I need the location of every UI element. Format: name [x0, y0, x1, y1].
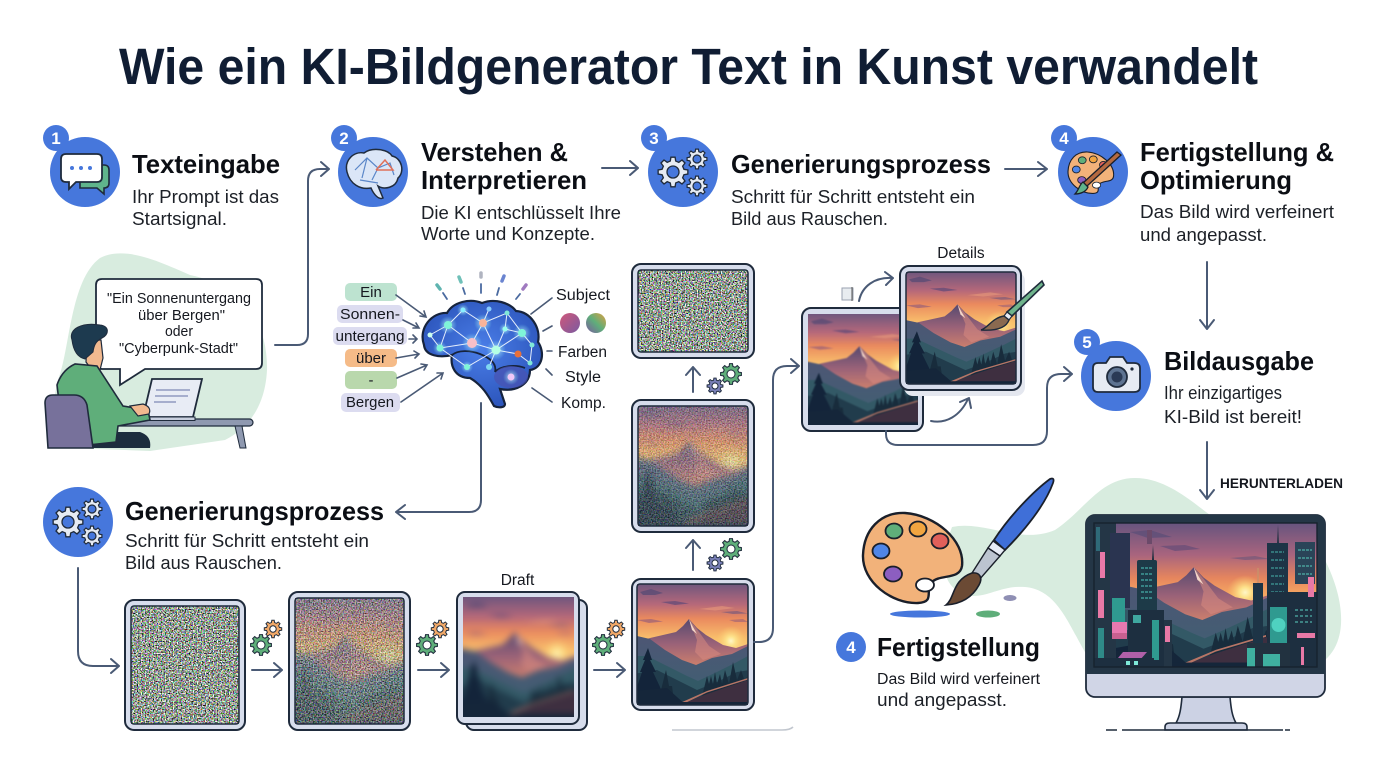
- arrow: step 3 to step 4: [1005, 162, 1047, 176]
- description: [1140, 202, 1334, 245]
- illustration: person at laptop: [45, 279, 262, 448]
- arrow: step 4 to step 5: [1200, 262, 1214, 329]
- panel: brain word analysis: [333, 273, 611, 412]
- arrow: [252, 663, 282, 677]
- gears: green and purple: [707, 364, 741, 394]
- cyberpunk city screen: [1096, 524, 1316, 666]
- palette: [863, 513, 962, 603]
- image frame: top noise: [632, 264, 754, 358]
- token chips: Bergen: [346, 394, 394, 411]
- description: Bild aus Rauschen.: [731, 209, 888, 229]
- colour swatches: [560, 313, 606, 333]
- icon: camera: [1074, 329, 1151, 411]
- icon: small paint brush: [981, 281, 1044, 330]
- gears: green and orange: [417, 620, 449, 655]
- description: [1164, 383, 1302, 427]
- arrow: brain to generation: [396, 403, 481, 519]
- heading: Optimierung: [1140, 165, 1292, 195]
- icon: brain: [331, 125, 408, 207]
- arrow: sharp frame to optimisation: [754, 359, 799, 642]
- output labels: Subject: [556, 287, 611, 304]
- icon: palette: [1051, 125, 1128, 207]
- speech bubble with prompt: oder: [165, 323, 193, 340]
- arrow: curved from refined: [931, 398, 971, 422]
- icon: camera: 5: [1082, 333, 1092, 352]
- laptop: [142, 379, 202, 420]
- gears: green and purple: [707, 539, 741, 571]
- label: HERUNTERLADEN: HERUNTERLADEN: [1220, 475, 1343, 491]
- label: Draft: Draft: [501, 572, 535, 589]
- speech bubble with prompt: "Cyberpunk-Stadt": [119, 340, 238, 357]
- arrow: step 1 to step 2: [275, 162, 329, 345]
- description: und angepasst.: [1140, 225, 1267, 245]
- description: und angepasst.: [877, 690, 1007, 710]
- speech bubble with prompt: [96, 279, 262, 385]
- panel: Fertigstellung lower: [836, 632, 1041, 710]
- description: Das Bild wird verfeinert: [1140, 202, 1334, 222]
- heading: Generierungsprozess: [731, 149, 991, 179]
- icon: gears: [641, 125, 718, 207]
- icon: chat bubbles: 1: [51, 129, 61, 148]
- heading: Generierungsprozess: [125, 496, 384, 526]
- panel: step 2 Verstehen und Interpretieren: [331, 125, 621, 244]
- monitor body: [1086, 515, 1325, 697]
- desk: [104, 419, 253, 448]
- faint bottom line: [672, 727, 793, 730]
- output labels: Farben: [558, 344, 607, 361]
- panel: step 1 Texteingabe: [43, 125, 280, 229]
- description: Schritt für Schritt entsteht ein: [731, 187, 975, 207]
- output labels: Style: [565, 369, 601, 386]
- screen border: [1094, 523, 1317, 667]
- title: Wie ein KI-Bildgenerator Text in Kunst verwandelt: [119, 38, 1258, 95]
- icon: gears: [43, 487, 113, 557]
- person: [57, 324, 150, 448]
- description: [132, 187, 279, 229]
- description: [731, 187, 975, 229]
- activity rays: [437, 273, 526, 299]
- heading: [421, 137, 587, 195]
- blob: right green background: [944, 478, 1341, 660]
- badge: 4: [836, 632, 866, 662]
- token chips: über: [356, 350, 386, 367]
- arrow: up to middle frame: [686, 540, 700, 570]
- description: Das Bild wird verfeinert: [877, 671, 1041, 688]
- heading: Fertigstellung: [877, 632, 1040, 662]
- image frame: sharp mountain: [622, 569, 763, 724]
- arrow: curved to details: [859, 272, 893, 301]
- stand: [1106, 697, 1290, 730]
- panel: Generierungsprozess lower: [43, 487, 384, 573]
- description: [877, 671, 1041, 710]
- icon: palette: 4: [1059, 129, 1069, 148]
- output connector lines: [531, 298, 552, 402]
- token chips: [333, 283, 407, 412]
- image frame: noisy mountain: [280, 582, 419, 744]
- brush: [946, 478, 1054, 605]
- image frame: noisy mountain upper: [623, 391, 763, 545]
- token chips: Ein: [360, 284, 382, 301]
- description: [421, 203, 621, 244]
- image frame: blurred draft: [448, 582, 589, 736]
- brain with neural network: [423, 301, 542, 407]
- arrow: to step 5: [886, 367, 1072, 445]
- token chips: -: [368, 372, 374, 389]
- description: Die KI entschlüsselt Ihre: [421, 203, 621, 223]
- arrow: [594, 663, 625, 677]
- output labels: [556, 287, 611, 412]
- icon: small crop: [842, 287, 853, 301]
- heading: Interpretieren: [421, 165, 587, 195]
- description: Bild aus Rauschen.: [125, 553, 282, 573]
- description: Startsignal.: [132, 209, 227, 229]
- icon: gears: 3: [649, 129, 659, 148]
- chair: [45, 395, 93, 448]
- arrow: download: [1200, 442, 1214, 499]
- arrows from tokens to brain: [396, 295, 443, 402]
- heading: Bildausgabe: [1164, 346, 1314, 376]
- arrow: [418, 663, 449, 677]
- icon: chat bubbles: [43, 125, 120, 207]
- token chips: untergang: [336, 328, 404, 345]
- description: [125, 531, 369, 573]
- image frame: pure noise: [125, 600, 245, 730]
- output labels: Komp.: [561, 395, 606, 412]
- description: Worte und Konzepte.: [421, 224, 595, 244]
- image frame: details front: [891, 258, 1031, 402]
- panel: step 3 Generierungsprozess: [641, 125, 991, 229]
- speech bubble with prompt: über Bergen": [138, 307, 225, 324]
- heading: [1140, 137, 1334, 195]
- heading: Verstehen &: [421, 137, 568, 167]
- description: Ihr einzigartiges: [1164, 383, 1282, 403]
- gears: green and orange: [593, 620, 625, 655]
- heading: Texteingabe: [132, 149, 280, 179]
- arrow: up to noise frame: [686, 367, 700, 392]
- description: Ihr Prompt ist das: [132, 187, 279, 207]
- label: Details: Details: [937, 245, 985, 262]
- image frame: refined back: [793, 300, 933, 442]
- arrow: step 2 to step 3: [602, 161, 638, 175]
- badge: 4: 4: [846, 638, 856, 657]
- illustration: palette and brush: [863, 478, 1054, 618]
- speech bubble with prompt: "Ein Sonnenuntergang: [107, 290, 251, 307]
- description: Schritt für Schritt entsteht ein: [125, 531, 369, 551]
- icon: brain: 2: [339, 129, 349, 148]
- illustration: monitor with final image: [1086, 515, 1325, 730]
- paint splashes: [890, 595, 1016, 618]
- description: KI-Bild ist bereit!: [1164, 407, 1302, 427]
- token chips: Sonnen-: [340, 306, 400, 323]
- panel: step 4 Fertigstellung und Optimierung: [1051, 125, 1334, 245]
- heading: Fertigstellung &: [1140, 137, 1334, 167]
- panel: step 5 Bildausgabe: [1074, 329, 1314, 427]
- gears: green and orange: [251, 620, 282, 655]
- arrow: gears to noise frame: [78, 568, 119, 673]
- blob: left green background: [54, 253, 267, 451]
